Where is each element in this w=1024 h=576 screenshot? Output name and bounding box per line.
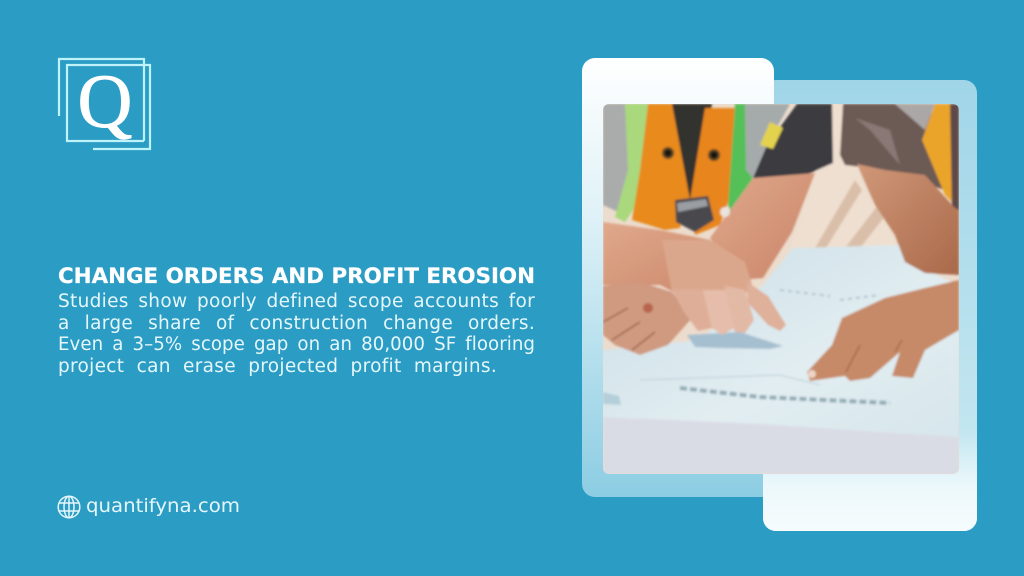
photo panels bbox=[582, 58, 977, 531]
panel: front left bbox=[582, 58, 774, 497]
blueprint paper bbox=[603, 245, 959, 440]
dark sleeve bbox=[753, 104, 833, 182]
table edge bbox=[603, 417, 959, 474]
body text: project can erase projected profit margins. bbox=[58, 356, 497, 377]
body text bbox=[58, 291, 535, 377]
plan markings bbox=[680, 388, 890, 403]
logo bbox=[58, 58, 152, 150]
website link: quantifyna.com bbox=[86, 495, 240, 517]
yellow tag bbox=[760, 122, 783, 149]
logo: Q bbox=[78, 60, 132, 144]
vest eyelets bbox=[662, 147, 674, 159]
panel: back right bbox=[763, 80, 977, 531]
vest left side bbox=[603, 104, 629, 212]
panel: back right lower overlap bbox=[763, 474, 977, 531]
background planks bbox=[814, 104, 875, 206]
device clipped on vest bbox=[675, 196, 714, 232]
right man arm bbox=[857, 164, 959, 275]
horizontal forearm bbox=[603, 221, 708, 292]
photo: workers reviewing plans bbox=[603, 104, 959, 474]
fist bbox=[603, 282, 692, 355]
body text: Studies show poorly defined scope accounts for bbox=[58, 291, 535, 312]
body text: Even a 3–5% scope gap on an 80,000 SF flooring bbox=[58, 334, 535, 355]
left arm upper bbox=[710, 173, 815, 280]
heading: CHANGE ORDERS AND PROFIT EROSION bbox=[58, 264, 535, 289]
pointing hand back bbox=[662, 240, 752, 295]
right man sleeve bbox=[840, 104, 945, 190]
body text: a large share of construction change orders. bbox=[58, 313, 535, 334]
right hand bbox=[807, 280, 959, 381]
hand shadow bbox=[687, 332, 783, 349]
pointing fingers bbox=[747, 282, 786, 331]
right man vest bbox=[922, 104, 955, 205]
